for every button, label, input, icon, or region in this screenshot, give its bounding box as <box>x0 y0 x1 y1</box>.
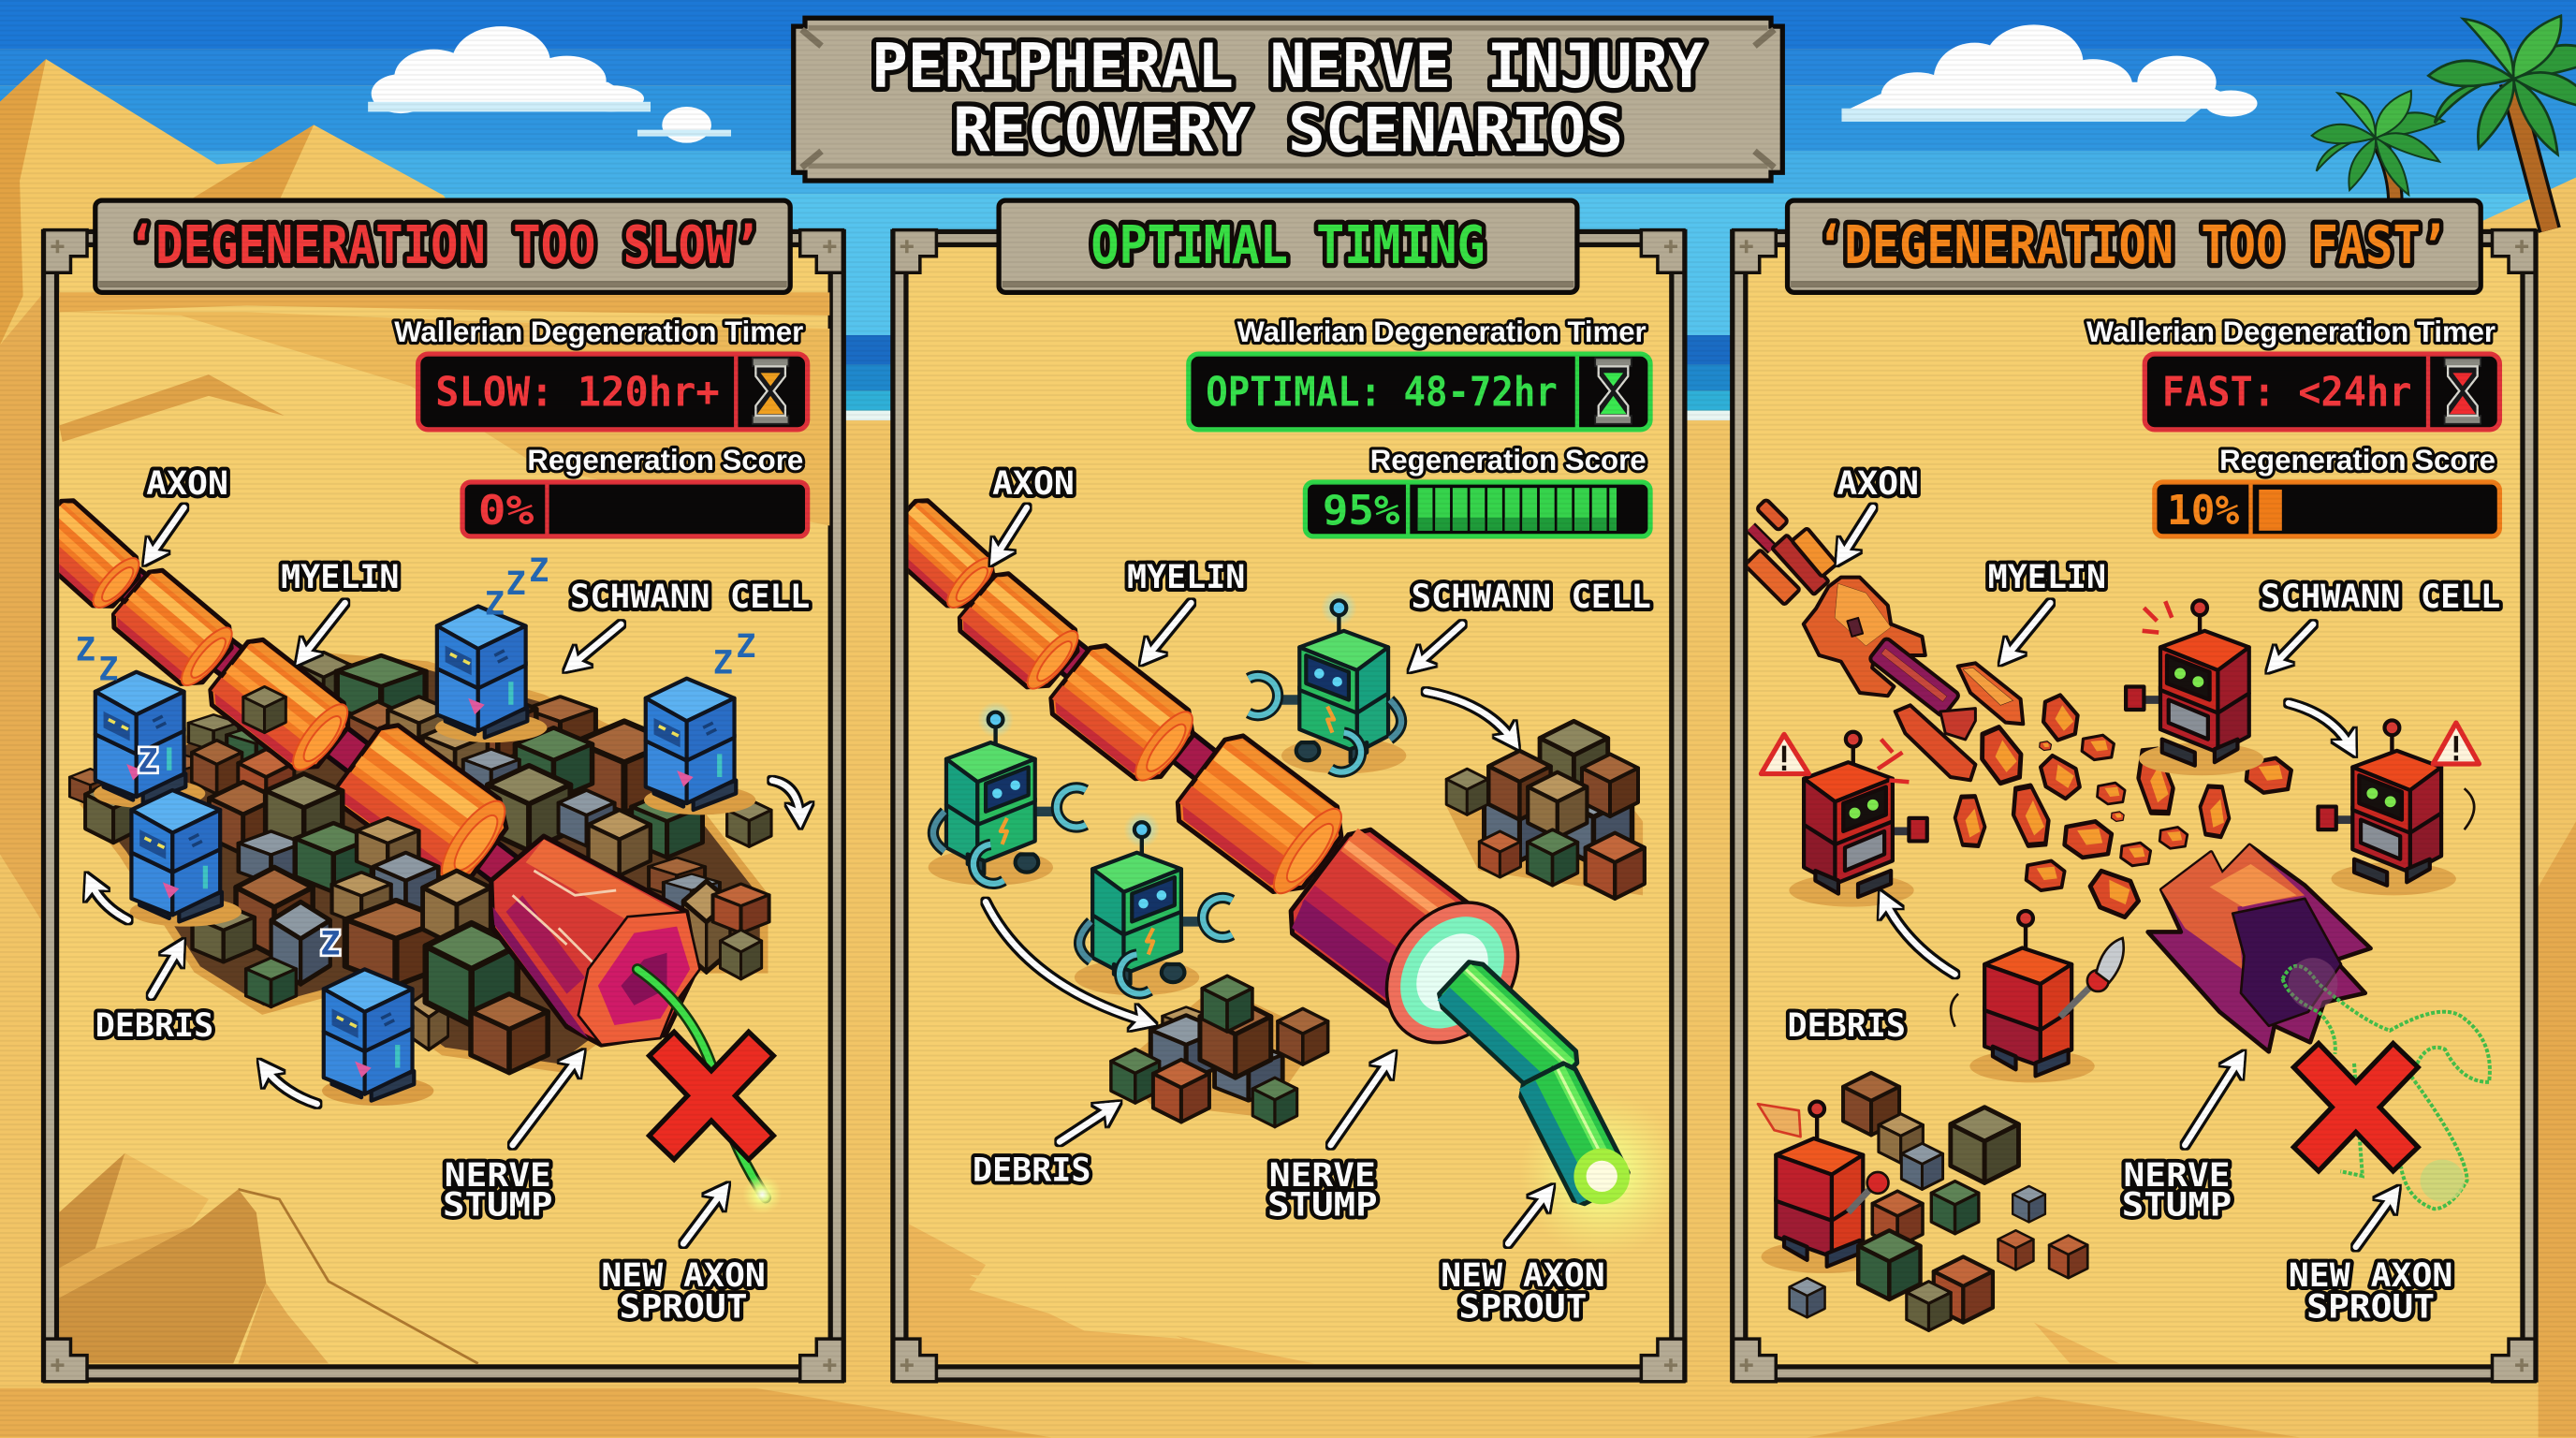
score bar: 10 percent <box>2155 482 2499 536</box>
cube in front of stump <box>471 994 548 1073</box>
icon: red X blocked <box>2318 1068 2393 1147</box>
illustration: healthy nerve <box>878 495 1684 1256</box>
score label: Regeneration Score <box>527 443 803 477</box>
sleeping z marks <box>76 551 755 962</box>
score bar: 0 percent: 0% <box>478 487 534 535</box>
panel 1 header: ‘DEGENERATION TOO SLOW’ <box>128 215 761 276</box>
icon: hourglass <box>753 359 788 424</box>
score bar: 0 percent <box>462 482 808 536</box>
axon shards <box>1895 663 2023 780</box>
labels: NEW AXON <box>601 1256 766 1295</box>
icon: hourglass <box>2445 359 2481 424</box>
lone cube <box>727 800 771 846</box>
labels: STUMP <box>1267 1186 1378 1224</box>
arrows <box>986 507 1547 1243</box>
sleeping z marks: Z <box>138 742 158 781</box>
sleeping z marks: Z <box>736 627 755 666</box>
nerve: axon core <box>994 572 1338 876</box>
timer box: slow <box>418 354 808 430</box>
sleeping z marks: Z <box>320 924 340 962</box>
labels: NERVE <box>445 1156 551 1195</box>
title text line two: RECOVERY SCENARIOS <box>953 95 1623 166</box>
panel 2 header: OPTIMAL TIMING <box>1090 215 1486 276</box>
new axon sprout: stunted <box>637 969 782 1214</box>
timer label: Wallerian Degeneration Timer <box>2086 315 2496 348</box>
labels: STUMP <box>2122 1186 2232 1224</box>
debris pile: upper right <box>1445 721 1645 899</box>
timer box: optimal: OPTIMAL: 48-72hr <box>1206 368 1558 416</box>
labels <box>95 464 810 1326</box>
score bar: 95 percent: 95% <box>1323 487 1400 535</box>
panel: optimal timing <box>878 200 1684 1382</box>
illustration: fragmented nerve <box>1745 499 2490 1330</box>
panel 1 header <box>95 200 790 292</box>
palm trees <box>2312 16 2576 230</box>
labels: NEW AXON <box>1441 1256 1605 1295</box>
icon: red X blocked <box>674 1056 749 1136</box>
spear tool <box>2060 938 2124 1017</box>
panel 3 header <box>1788 200 2481 292</box>
sleeping z marks: Z <box>76 630 95 668</box>
alert marks <box>1758 601 2479 1137</box>
title text: PERIPHERAL NERVE INJURY <box>871 32 1705 102</box>
panel 3 header: ‘DEGENERATION TOO FAST’ <box>1817 215 2448 276</box>
rubble behind nerve <box>69 653 769 1068</box>
timer label: Wallerian Degeneration Timer <box>1237 315 1647 348</box>
timer box: slow: SLOW: 120hr+ <box>435 368 720 416</box>
sleeping z marks: Z <box>529 551 549 590</box>
timer box: fast <box>2144 354 2499 430</box>
timer label: Wallerian Degeneration Timer <box>394 315 803 348</box>
shattered nerve <box>1745 499 1960 717</box>
torn nerve stump <box>2148 845 2371 1051</box>
labels: DEBRIS <box>95 1006 213 1045</box>
sleeping z marks: Z <box>98 650 118 688</box>
debris pile: lower <box>1111 976 1328 1127</box>
nerve: myelin segments <box>908 498 1344 895</box>
labels: SCHWANN CELL <box>2261 578 2500 616</box>
score label: Regeneration Score <box>2219 443 2496 477</box>
clouds <box>368 24 2258 143</box>
new axon sprout: glowing green <box>1437 960 1670 1241</box>
labels: MYELIN <box>281 558 399 596</box>
nerve: myelin segments <box>59 498 509 876</box>
arrows <box>1841 507 2393 1247</box>
nerve: axon core <box>59 509 519 882</box>
sleeping z marks: Z <box>713 643 733 682</box>
labels: DEBRIS <box>1788 1006 1906 1045</box>
labels: NEW AXON <box>2289 1256 2452 1295</box>
sleeping z marks: Z <box>485 584 505 623</box>
labels: SCHWANN CELL <box>570 578 810 616</box>
labels: STUMP <box>443 1186 553 1224</box>
labels <box>1788 464 2500 1326</box>
panel 1 frame and sand <box>44 230 842 1382</box>
panel 2 frame and sand <box>894 230 1684 1382</box>
panel: degeneration too fast <box>1734 200 2535 1382</box>
labels: DEBRIS <box>973 1152 1090 1190</box>
labels: NERVE <box>1269 1156 1376 1195</box>
nerve stump: cracked <box>491 836 700 1045</box>
score bar: 10 percent: 10% <box>2167 487 2240 535</box>
timer box: fast: FAST: <24hr <box>2162 368 2411 416</box>
ghost sprout: failed dashed axon <box>2283 958 2490 1209</box>
labels: NERVE <box>2123 1156 2231 1195</box>
labels: AXON <box>146 464 228 503</box>
arrows <box>91 507 800 1243</box>
labels <box>973 464 1651 1326</box>
arm with debris <box>1848 1172 1888 1212</box>
sleeping schwann cells <box>94 606 755 1106</box>
debris scattered <box>1790 1073 2087 1330</box>
labels: MYELIN <box>1988 558 2106 596</box>
labels: SPROUT <box>620 1287 748 1326</box>
panel: degeneration too slow <box>23 200 842 1382</box>
labels: MYELIN <box>1127 558 1245 596</box>
score label: Regeneration Score <box>1370 443 1647 477</box>
myelin fragments <box>1952 691 2291 922</box>
attacking schwann cells <box>1761 600 2456 1273</box>
active schwann cells <box>929 590 1406 995</box>
labels: SPROUT <box>2306 1287 2435 1326</box>
nerve: axon core fill <box>908 515 1335 873</box>
labels: AXON <box>992 464 1075 503</box>
nerve stump: clean cut with glow <box>1288 828 1520 1045</box>
title plaque <box>794 18 1782 181</box>
score bar: 95 percent <box>1305 482 1650 536</box>
rubble overlapping nerve <box>193 686 518 1049</box>
icon: hourglass <box>1595 359 1632 424</box>
panel 2 header <box>999 200 1577 292</box>
labels: AXON <box>1837 464 1919 503</box>
sleeping z marks: Z <box>506 565 526 603</box>
timer box: optimal <box>1189 354 1650 430</box>
labels: SCHWANN CELL <box>1412 578 1651 616</box>
illustration: debris-buried nerve <box>23 495 782 1214</box>
labels: SPROUT <box>1459 1287 1587 1326</box>
panel 3 frame and sand <box>1734 230 2535 1382</box>
